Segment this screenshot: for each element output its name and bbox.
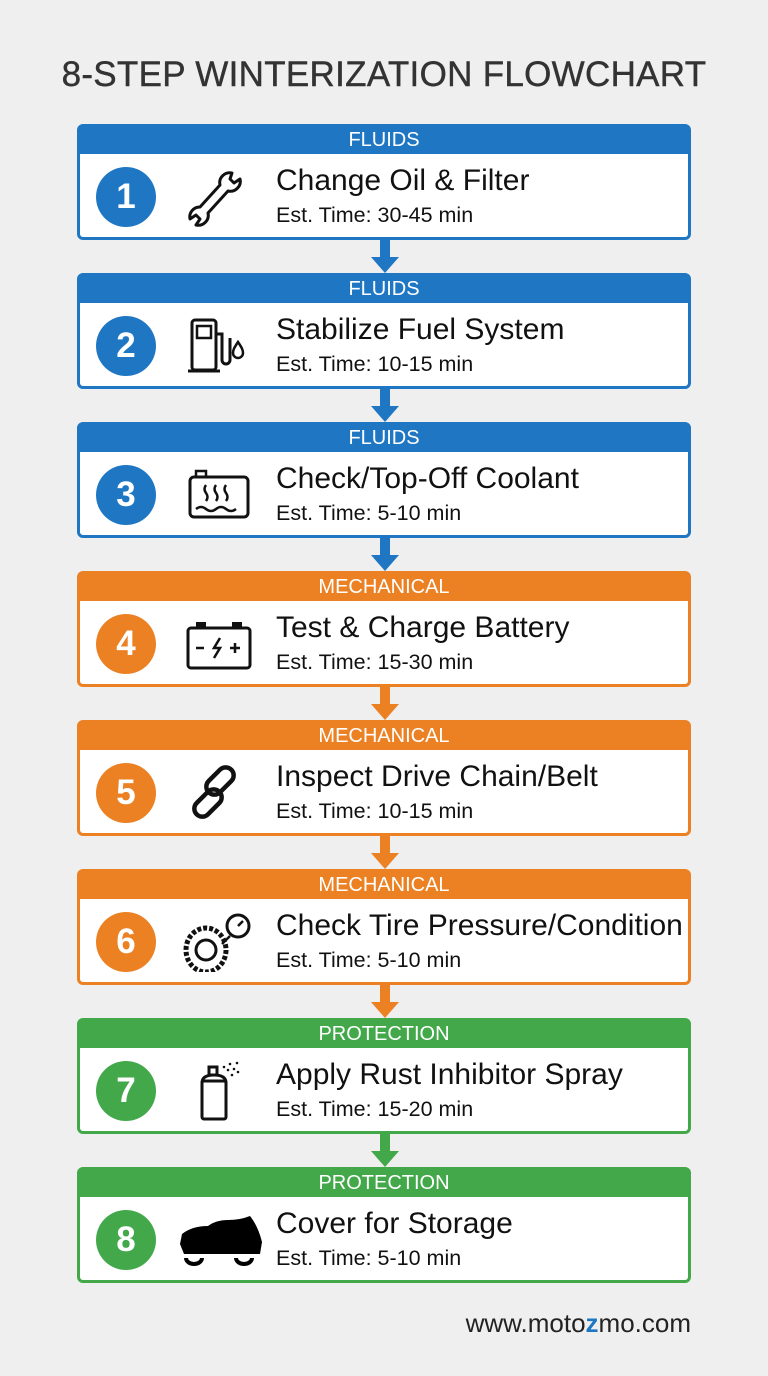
card: step 1: FLUIDS (348, 129, 420, 151)
icon: coolant radiator (188, 470, 250, 518)
arrow (371, 538, 399, 571)
card: step 4 (77, 571, 691, 687)
card: step 6: Est. Time: 5-10 min (276, 948, 461, 972)
card: step 7: PROTECTION (318, 1023, 450, 1045)
card: step 5 (77, 720, 691, 836)
card: step 7: Apply Rust Inhibitor Spray (276, 1058, 623, 1091)
card: step 3: Est. Time: 5-10 min (276, 501, 461, 525)
card: step 2: 2 (116, 326, 136, 365)
card: step 6: Check Tire Pressure/Condition (276, 909, 683, 942)
footer: website: www.motozmo.com (466, 1308, 691, 1338)
card: step 1: Change Oil & Filter (276, 164, 529, 197)
card: step 7 (77, 1018, 691, 1134)
card: step 8: PROTECTION (318, 1172, 450, 1194)
card: step 2: FLUIDS (348, 278, 420, 300)
card: step 1 (77, 124, 691, 240)
card: step 8: Cover for Storage (276, 1207, 513, 1240)
arrow (371, 836, 399, 869)
card: step 2: Est. Time: 10-15 min (276, 352, 473, 376)
card: step 3: 3 (116, 475, 136, 514)
title: 8-STEP WINTERIZATION FLOWCHART (62, 55, 706, 94)
card: step 6: MECHANICAL (318, 874, 450, 896)
card: step 5: 5 (116, 773, 136, 812)
card: step 6: 6 (116, 922, 136, 961)
card: step 1: 1 (116, 177, 136, 216)
icon: chain (192, 765, 236, 819)
card: step 7: 7 (116, 1071, 136, 1110)
card: step 4: MECHANICAL (318, 576, 450, 598)
card: step 8 (77, 1167, 691, 1283)
card: step 5: MECHANICAL (318, 725, 450, 747)
arrow (371, 687, 399, 720)
card: step 4: Est. Time: 15-30 min (276, 650, 473, 674)
card: step 3: FLUIDS (348, 427, 420, 449)
card: step 2 (77, 273, 691, 389)
card: step 8: 8 (116, 1220, 136, 1259)
card: step 5: Inspect Drive Chain/Belt (276, 760, 598, 793)
card: step 4: Test & Charge Battery (276, 611, 569, 644)
icon: fuel pump (188, 318, 244, 372)
icon: wrench (188, 171, 242, 227)
card: step 4: 4 (116, 624, 136, 663)
card: step 6 (77, 869, 691, 985)
card: step 5: Est. Time: 10-15 min (276, 799, 473, 823)
icon: covered motorcycle (180, 1216, 262, 1266)
arrow (371, 985, 399, 1018)
icon: tire gauge (184, 914, 250, 972)
card: step 1: Est. Time: 30-45 min (276, 203, 473, 227)
card: step 3 (77, 422, 691, 538)
icon: battery (186, 622, 252, 670)
card: step 2: Stabilize Fuel System (276, 313, 564, 346)
arrow (371, 1134, 399, 1167)
arrow (371, 389, 399, 422)
card: step 7: Est. Time: 15-20 min (276, 1097, 473, 1121)
arrow (371, 240, 399, 273)
card: step 3: Check/Top-Off Coolant (276, 462, 579, 495)
icon: spray can (200, 1062, 240, 1120)
card: step 8: Est. Time: 5-10 min (276, 1246, 461, 1270)
